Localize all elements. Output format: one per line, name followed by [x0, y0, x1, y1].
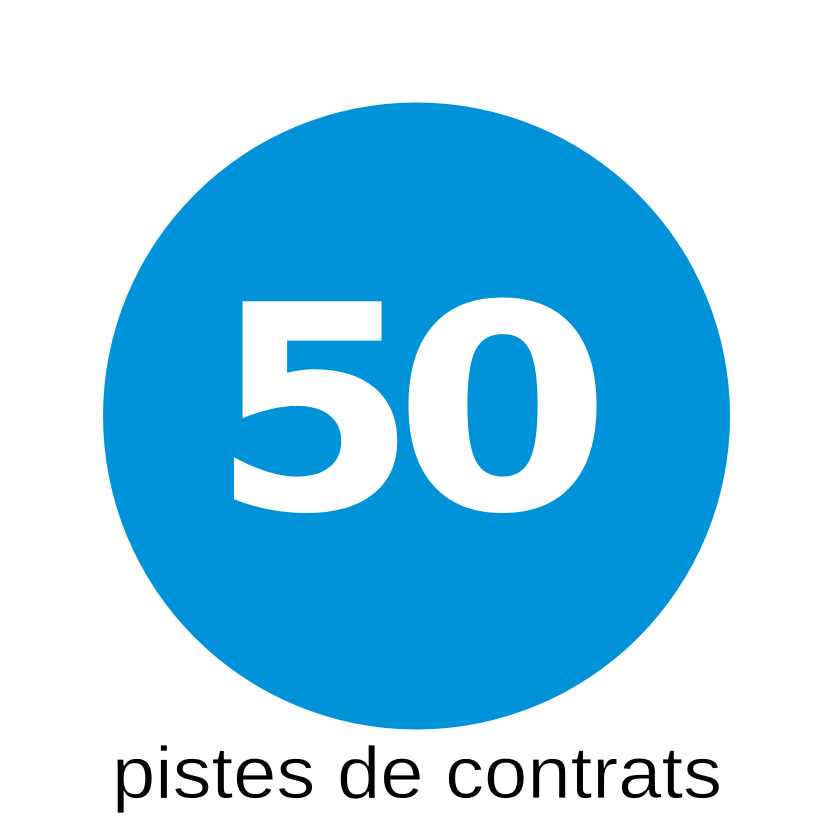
number: 50	[211, 245, 612, 577]
blue circle	[103, 102, 730, 730]
number: 50: 0	[394, 245, 612, 577]
number: 50: 5	[211, 245, 418, 577]
label: pistes de contrats: pistes de contrats	[112, 733, 722, 814]
